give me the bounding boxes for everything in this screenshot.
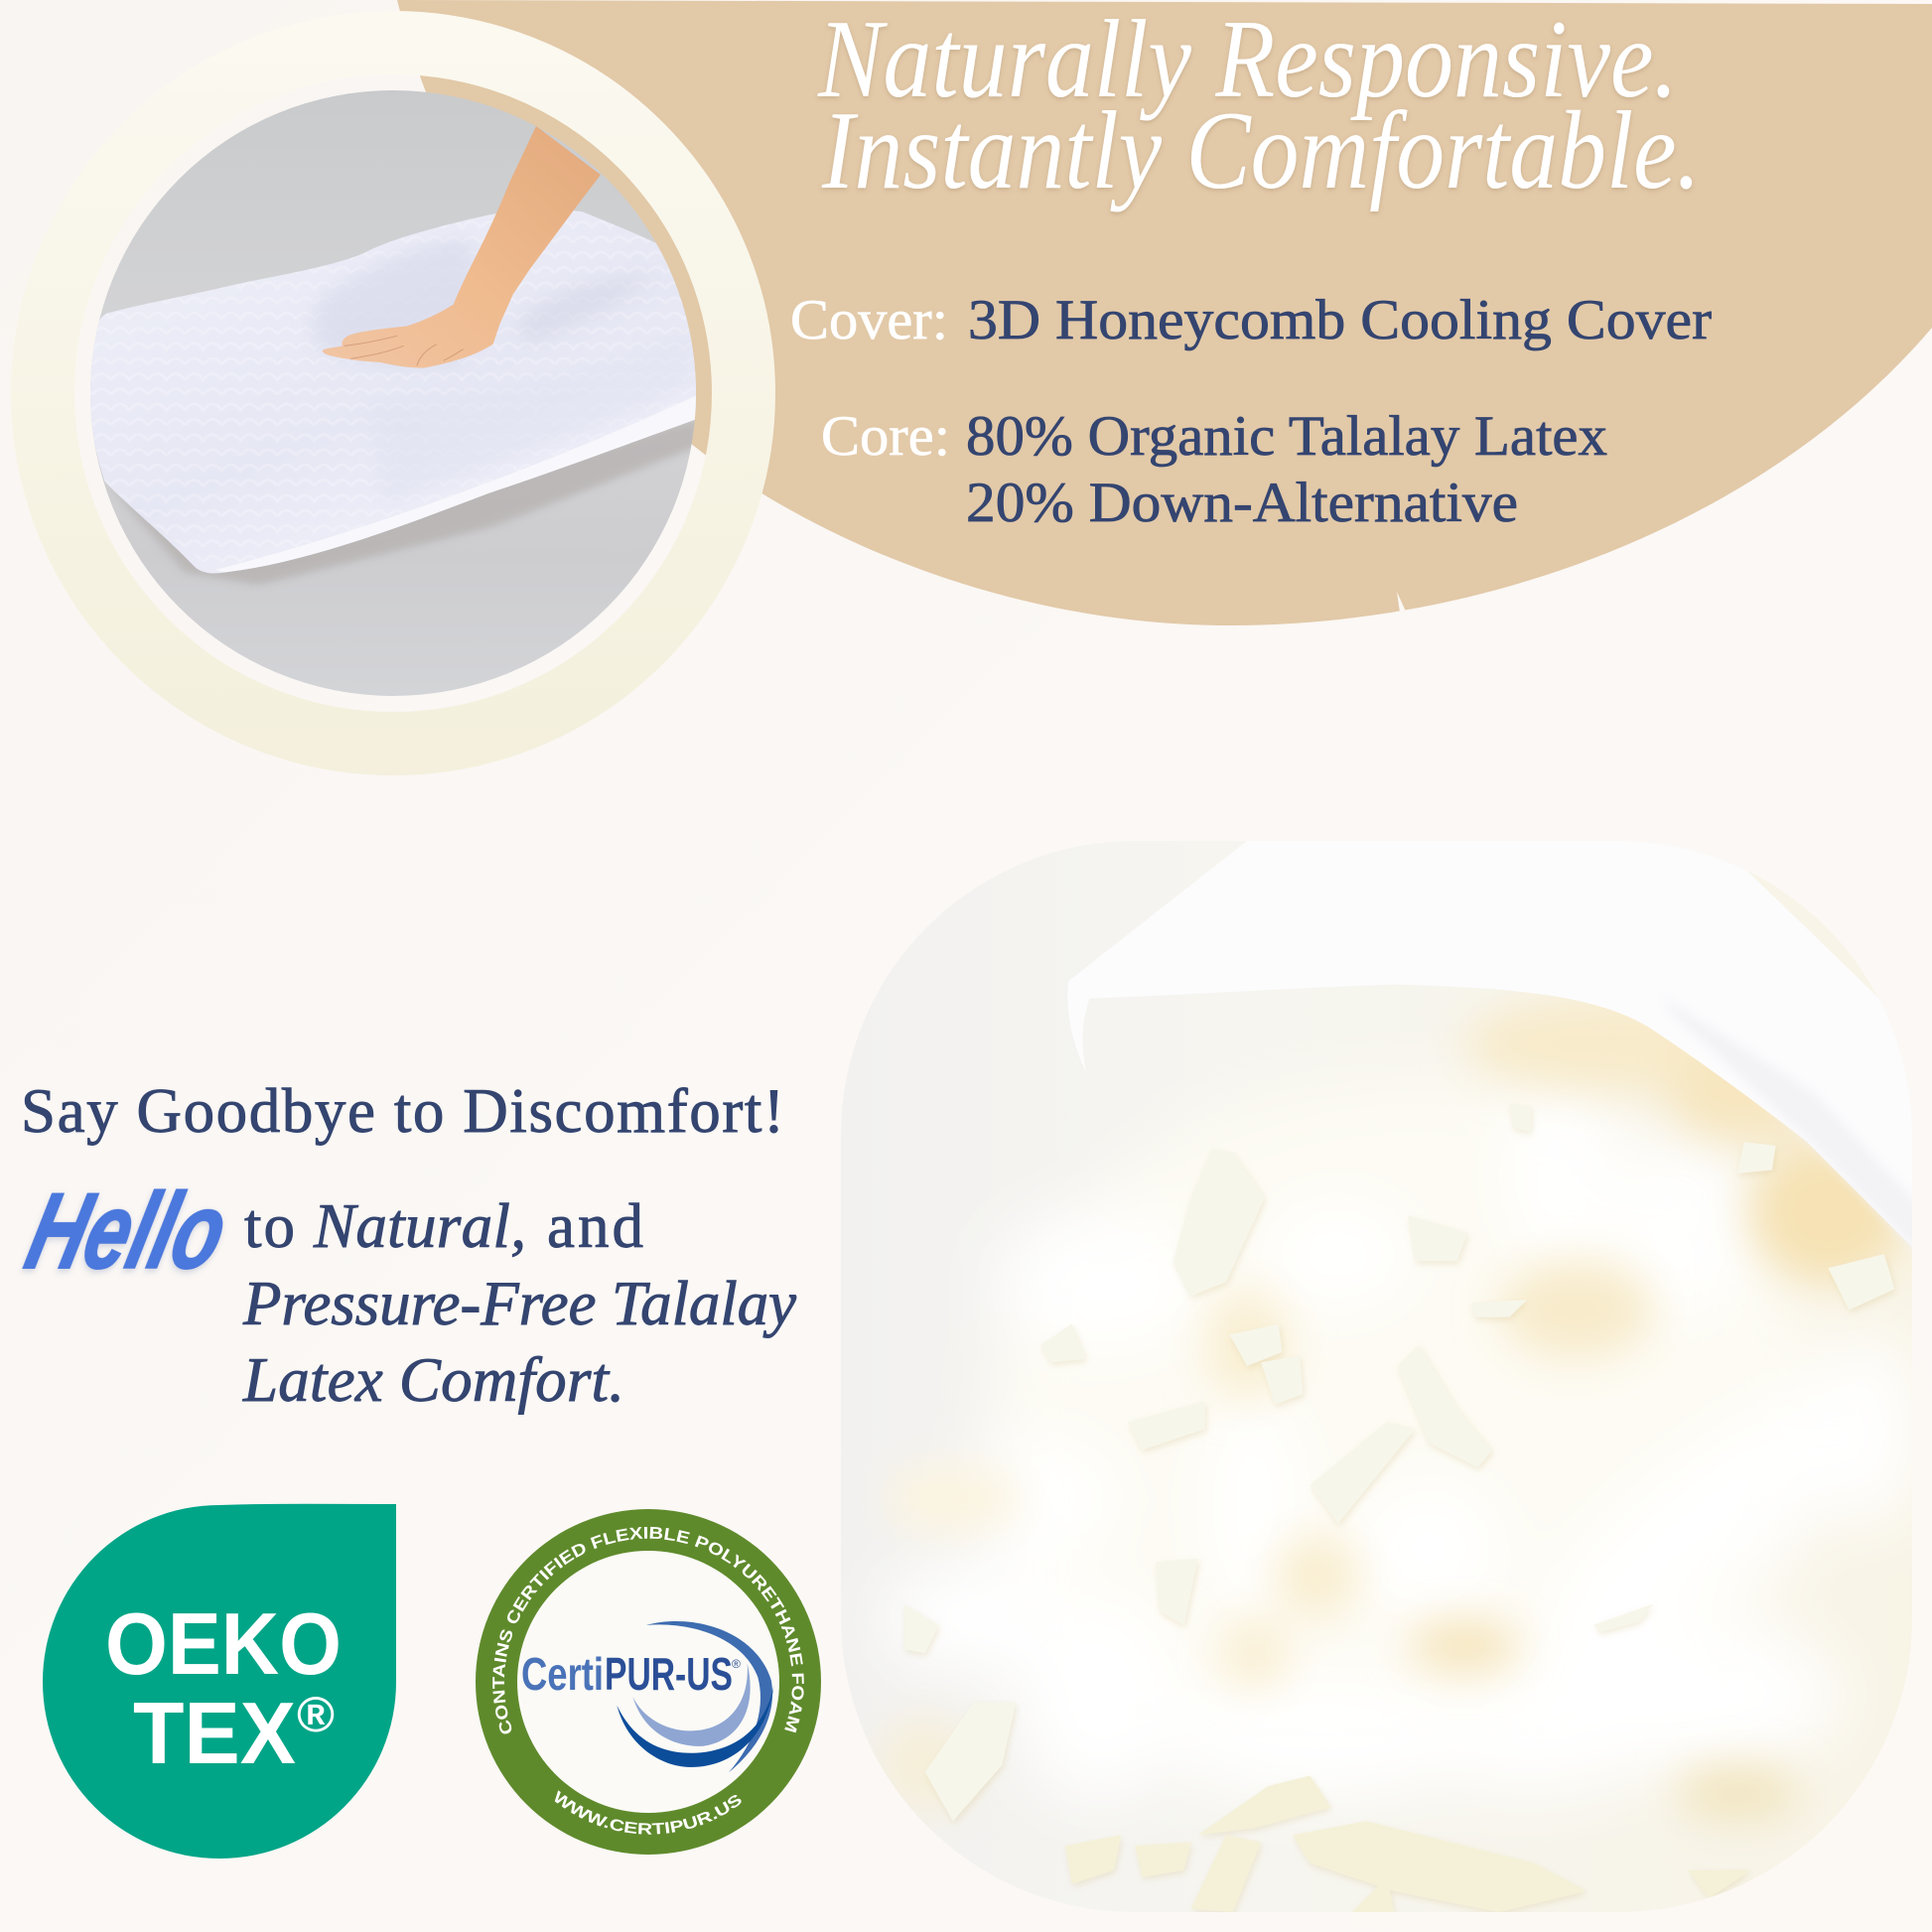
- pillow cover: [1067, 834, 1926, 1261]
- text block: hello message: to: [244, 1191, 295, 1261]
- panel: tan header shape: [397, 0, 1932, 625]
- heading line 1: Naturally Responsive.: [817, 0, 1678, 121]
- warm undertones: [876, 995, 1905, 1821]
- script word: hello: Hello: [16, 1172, 238, 1292]
- pillow body: [89, 209, 699, 574]
- pillow shadow: [105, 418, 699, 585]
- arm and hand: [323, 126, 601, 368]
- text block: hello message: Latex Comfort.: [242, 1345, 624, 1415]
- text block: hello message: and: [547, 1191, 643, 1261]
- badge: CertiPUR-US: WWW.CERTIPUR.US: [554, 1790, 742, 1835]
- text block: hello message: Pressure-Free Talalay: [242, 1269, 796, 1338]
- badge: CertiPUR-US: PUR-US: [605, 1648, 733, 1700]
- badge: CertiPUR-US: CONTAINS CERTIFIED FLEXIBLE POLYURETHANE FOAM: [492, 1527, 804, 1733]
- text: core material line 2: 20% Down-Alternative: [966, 472, 1518, 534]
- text: core material line 1: 80% Organic Talalay Latex: [966, 405, 1607, 468]
- pillow fabric texture: [89, 209, 699, 570]
- badge: OEKO-TEX: [43, 1504, 396, 1859]
- heading line 2: Instantly Comfortable.: [821, 89, 1701, 212]
- text block: hello message: [242, 1191, 796, 1415]
- text: cover material: 3D Honeycomb Cooling Cover: [968, 289, 1712, 351]
- foam chunks: [904, 1104, 1894, 1912]
- pillow dent shading: [314, 242, 472, 347]
- photo: hand pressing pillow: [79, 79, 715, 715]
- notch in tan shape: [1397, 592, 1406, 613]
- headline: say goodbye: Say Goodbye to Discomfort!: [21, 1076, 784, 1146]
- photo: latex and down-alternative fill: [834, 834, 1932, 1926]
- badge: CertiPUR-US: Certi: [521, 1648, 604, 1700]
- label: core: Core:: [821, 405, 950, 468]
- badge: OEKO-TEX: ®: [297, 1687, 335, 1742]
- white cotton wisps: [883, 1065, 1932, 1800]
- text block: hello message: Natural,: [313, 1191, 526, 1261]
- badge: CertiPUR-US: ®: [732, 1657, 741, 1671]
- badge: CertiPUR-US: [476, 1509, 821, 1855]
- badge: OEKO-TEX: TEX: [133, 1684, 296, 1782]
- decorative ring around pillow photo: [43, 43, 744, 744]
- pillow side panel: [215, 394, 699, 573]
- label: cover: Cover:: [790, 289, 948, 351]
- badge: OEKO-TEX: OEKO: [105, 1594, 342, 1693]
